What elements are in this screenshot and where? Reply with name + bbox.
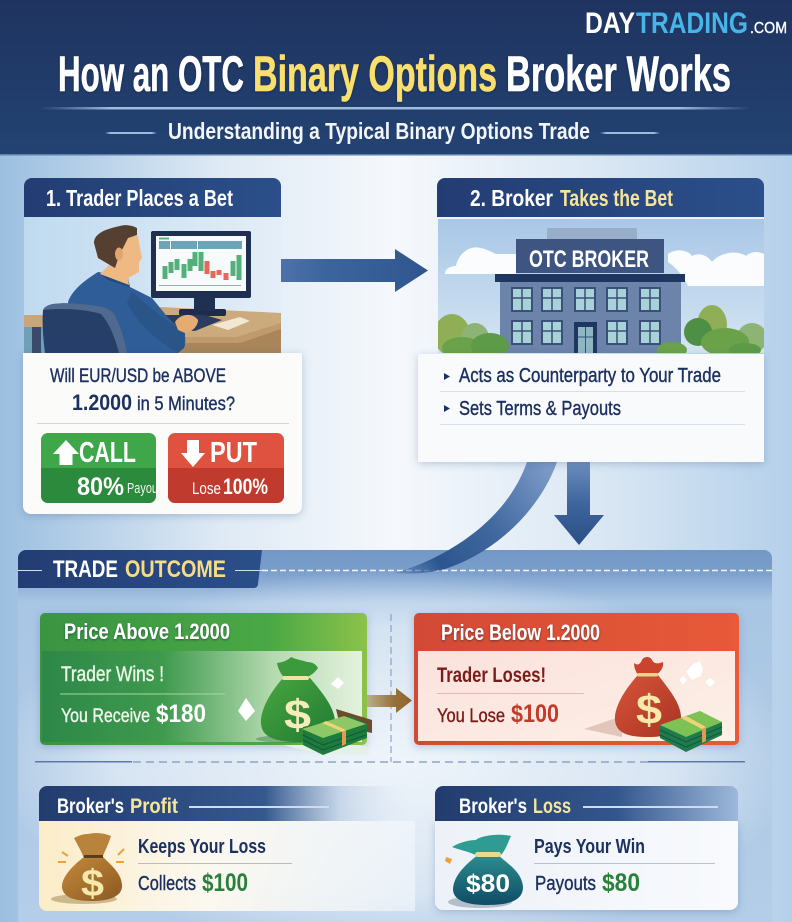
PUT button: 100%: [223, 474, 268, 499]
green card text: $180: [156, 700, 206, 728]
office chair: [43, 303, 127, 353]
broker's loss heading: Loss: [533, 795, 571, 818]
broker's loss heading: [435, 786, 738, 821]
PUT button: [168, 433, 284, 503]
question text: Will EUR/USD be ABOVE: [50, 365, 226, 387]
step 1 heading: 1. Trader Places a Bet: [46, 185, 233, 211]
CALL button: 80%: [77, 473, 124, 501]
illustration: OTC broker building: [434, 219, 767, 359]
icon: red money bag with cash: [584, 657, 722, 752]
brand logo: DAY: [585, 7, 635, 40]
building: [495, 228, 685, 354]
panel: broker's profit: [39, 786, 415, 911]
cash stack: [302, 709, 372, 755]
broker's profit text: [138, 835, 292, 897]
heading: trade outcome: TRADE: [53, 556, 118, 583]
broker role list: [418, 354, 764, 462]
header band: [0, 0, 792, 156]
icon: sparkles: [238, 677, 344, 721]
icon: down arrow: [181, 440, 205, 467]
CALL button: CALL: [79, 437, 136, 469]
arrow: broker down to outcome: [554, 462, 604, 545]
icon: brown money bag: $: [81, 863, 104, 905]
icon: up arrow: [53, 440, 79, 465]
broker's profit text: $100: [202, 869, 248, 897]
monitor with candlestick chart: [151, 231, 251, 316]
title: [58, 46, 731, 102]
green card text: Price Above 1.2000: [64, 619, 230, 644]
red card text: You Lose: [437, 705, 505, 727]
dashed dividers: [35, 614, 745, 762]
desk papers and keyboard: [165, 315, 250, 331]
icon: green money bag with cash: [256, 657, 372, 755]
question text: 1.2000: [72, 390, 132, 415]
question card with buttons: [23, 353, 302, 514]
green card text: You Receive: [61, 705, 150, 727]
red card text: [437, 620, 600, 728]
PUT button: Lose: [192, 479, 221, 498]
step 2 heading: Takes the Bet: [560, 185, 673, 211]
broker role list: Acts as Counterparty to Your Trade: [459, 365, 721, 387]
arrow: curved path from broker to outcome: [395, 462, 557, 574]
green card text: [60, 619, 230, 728]
icon: sparkles: [679, 661, 715, 687]
red card text: Trader Loses!: [437, 664, 546, 687]
brand logo: TRADING: [636, 7, 748, 40]
illustration: trader at desk: [24, 217, 281, 353]
icon: red money bag with cash: $: [636, 686, 662, 733]
step 2 heading: 2. Broker: [470, 185, 553, 211]
broker's loss text: Pays Your Win: [534, 835, 645, 858]
trader figure: [68, 225, 198, 353]
building: OTC BROKER: [529, 246, 649, 273]
broker role list: Sets Terms & Payouts: [459, 398, 621, 420]
step 2 heading: [437, 178, 764, 217]
CALL button: Payout: [127, 480, 162, 497]
broker's profit heading: Profit: [130, 795, 178, 818]
panel: price below, trader loses: [414, 613, 739, 752]
question text: [50, 365, 235, 415]
broker's profit text: Keeps Your Loss: [138, 835, 266, 858]
brand logo: [585, 7, 787, 40]
red card text: $100: [511, 700, 559, 728]
PUT button: PUT: [210, 437, 257, 469]
question text: in 5 Minutes?: [137, 393, 235, 415]
step 1 heading: [24, 178, 281, 217]
green card text: Trader Wins !: [61, 663, 164, 686]
red card text: Price Below 1.2000: [441, 620, 600, 645]
cash stack: [660, 711, 722, 752]
broker's profit text: Collects: [138, 872, 196, 895]
icon: brown money bag: [51, 833, 124, 905]
clouds: [445, 247, 764, 286]
arrow: win to lose: [367, 688, 412, 713]
panel: step 1 trader places a bet: [23, 178, 302, 514]
broker's loss text: $80: [602, 869, 640, 897]
panel: broker's loss: [435, 786, 738, 910]
arrow: step 1 to step 2: [281, 249, 428, 292]
title: How an OTC: [58, 46, 244, 102]
bushes: [438, 305, 764, 353]
icon: green money bag with cash: $: [284, 691, 311, 738]
title: Binary Options: [253, 46, 497, 102]
broker's loss text: [534, 835, 715, 897]
desk: [24, 307, 281, 353]
CALL button: [41, 433, 162, 503]
panel: step 2 broker takes the bet: [418, 178, 767, 462]
broker's profit heading: Broker's: [57, 795, 124, 818]
broker's profit heading: [39, 786, 415, 821]
brand logo: .COM: [750, 20, 787, 37]
broker's loss heading: Broker's: [459, 795, 527, 818]
heading: trade outcome: [18, 550, 262, 588]
subtitle: Understanding a Typical Binary Options Trade: [168, 118, 590, 144]
panel: trade outcome section: [18, 550, 772, 922]
icon: teal money bag: [445, 835, 523, 908]
icon: teal money bag: $80: [466, 870, 510, 898]
heading: trade outcome: OUTCOME: [125, 556, 226, 583]
broker's loss text: Payouts: [535, 872, 596, 895]
panel: price above, trader wins: [40, 613, 372, 755]
